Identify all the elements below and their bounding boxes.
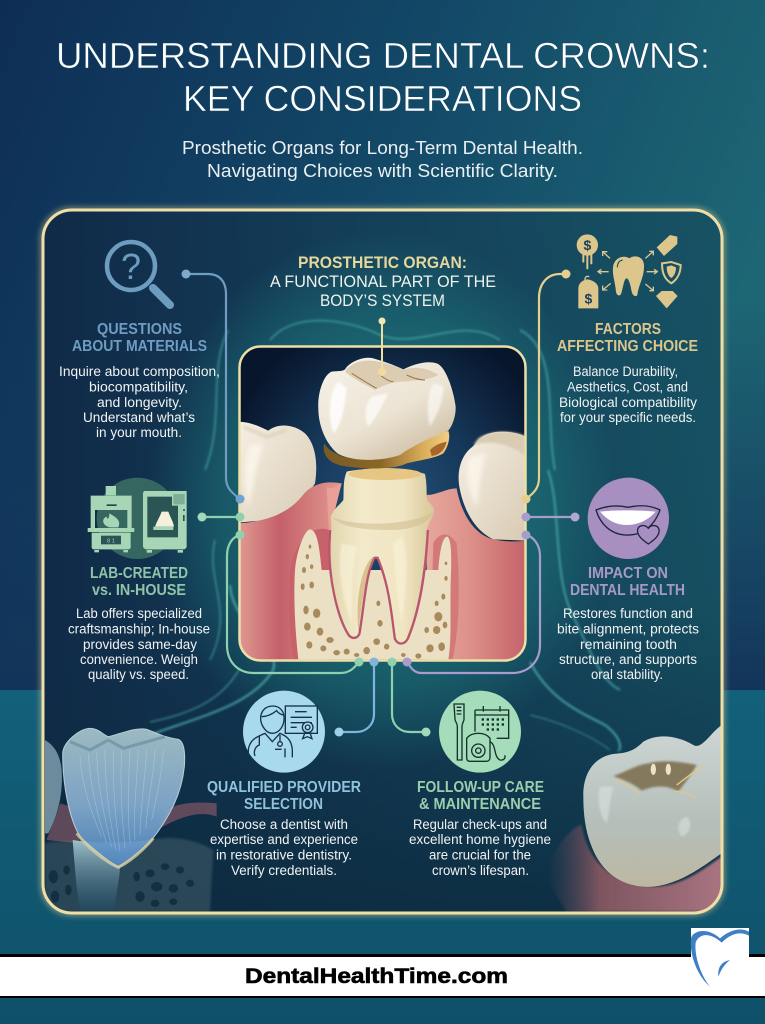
body text: Restores function and [563, 606, 693, 621]
title [56, 35, 710, 119]
connector lines [182, 270, 580, 736]
gum band [47, 802, 217, 843]
subtitle: Prosthetic Organs for Long-Term Dental Health. [182, 137, 583, 158]
subtitle: Navigating Choices with Scientific Clarity. [207, 160, 558, 181]
connector: impact lower loop [407, 535, 540, 673]
heading [570, 565, 685, 599]
body text: oral stability. [591, 667, 663, 682]
bone pores [301, 545, 448, 659]
junction dots on image frame [236, 494, 530, 666]
panel: factors affecting choice [557, 234, 698, 425]
heading [72, 321, 207, 355]
body text [210, 817, 358, 878]
heading: IMPACT ON [588, 565, 668, 582]
subtitle [182, 137, 583, 181]
floating crown [318, 358, 456, 460]
body text [409, 817, 551, 878]
connector: questions [182, 270, 240, 499]
image frame [240, 347, 525, 660]
heading: QUALIFIED PROVIDER [207, 779, 361, 796]
image border [240, 346, 526, 660]
icon: toothbrush, calendar, floss [439, 691, 521, 773]
body text: excellent home hygiene [409, 832, 551, 847]
panel: qualified provider selection [207, 691, 361, 878]
body text: Aesthetics, Cost, and [567, 380, 688, 394]
heading: SELECTION [244, 796, 323, 813]
heading [207, 779, 361, 813]
panel border [43, 210, 722, 913]
body text: Lab offers specialized [76, 606, 202, 621]
prepared tooth and roots [331, 469, 434, 642]
main panel background [43, 210, 722, 913]
occlusal fissure [613, 761, 697, 792]
heading: vs. IN-HOUSE [92, 582, 186, 599]
body text [559, 364, 697, 425]
panel: follow-up care and maintenance [409, 691, 551, 878]
heading: QUESTIONS [97, 321, 182, 338]
title: KEY CONSIDERATIONS [183, 78, 582, 119]
icon: smile with heart [588, 478, 669, 559]
footer band [0, 954, 765, 998]
decorative teal wisps [150, 321, 620, 750]
center heading: prosthetic organ [270, 253, 496, 310]
icon: tooth with factors: $ [584, 290, 592, 306]
side tooth [45, 740, 62, 833]
central pointer line [378, 318, 386, 376]
body text: craftsmanship; In-house [68, 622, 210, 636]
connector: lab [198, 512, 240, 522]
body text: remaining tooth [580, 637, 677, 652]
heading [90, 565, 188, 599]
title: UNDERSTANDING DENTAL CROWNS: [56, 35, 710, 76]
molar illustration, bottom right [547, 725, 722, 912]
right neighbouring tooth [459, 432, 527, 541]
icon: tooth with factors [577, 234, 681, 308]
body text: Balance Durability, [573, 364, 678, 379]
body text: Verify credentials. [231, 863, 337, 878]
heading [557, 321, 698, 355]
central tooth illustration [238, 318, 527, 660]
icon: furnace and milling machine [88, 478, 187, 559]
body text [59, 364, 220, 440]
icon: magnifying glass: ? [121, 246, 141, 287]
body text: biocompatibility, [89, 380, 188, 394]
center heading: prosthetic organ: A FUNCTIONAL PART OF THE [270, 272, 496, 291]
panel frame glow [43, 210, 722, 913]
body text: structure, and supports [559, 652, 697, 667]
enamel striations [80, 750, 163, 852]
root [73, 840, 150, 912]
body text: are crucial for the [429, 848, 531, 862]
icon: tooth with factors: $ [583, 237, 591, 253]
body text: and longevity. [97, 395, 182, 410]
body text: Understand what’s [83, 410, 195, 425]
connector: impact [526, 512, 580, 522]
connector: follow-up [392, 662, 430, 736]
icon: magnifying glass [107, 242, 170, 305]
left neighbouring tooth [238, 422, 316, 523]
heading: AFFECTING CHOICE [557, 338, 698, 355]
footer website text: DentalHealthTime.com [245, 965, 508, 988]
body text: Choose a dentist with [220, 817, 348, 832]
panel: questions about materials [59, 242, 220, 440]
gold band [324, 431, 449, 468]
center heading: prosthetic organ: BODY’S SYSTEM [320, 291, 445, 310]
body text [557, 606, 699, 682]
body text: crown’s lifespan. [432, 863, 529, 878]
heading: FACTORS [595, 321, 661, 338]
heading: FOLLOW-UP CARE [417, 779, 544, 796]
icon: furnace and milling machine: 8 1 [107, 538, 115, 544]
margin line [77, 833, 153, 867]
body text: expertise and experience [210, 832, 358, 847]
body text: in restorative dentistry. [216, 848, 352, 862]
body text: Regular check-ups and [413, 817, 547, 832]
connector: provider [334, 662, 374, 736]
body text: for your specific needs. [560, 410, 696, 425]
heading [417, 779, 544, 813]
heading: DENTAL HEALTH [570, 582, 685, 599]
body text: convenience. Weigh [80, 652, 198, 667]
icon: dentist and certificate [243, 691, 325, 773]
heading: ABOUT MATERIALS [72, 338, 207, 355]
body text: Inquire about composition, [59, 364, 220, 379]
footer logo: blue tooth [691, 928, 749, 987]
heading: LAB-CREATED [90, 565, 188, 582]
body text: in your mouth. [96, 425, 182, 440]
gums [238, 482, 342, 660]
body text: Biological compatibility [559, 395, 697, 410]
body text: provides same-day [83, 637, 197, 652]
periodontal ligament around roots [328, 530, 429, 645]
ghost tooth illustration, bottom left [45, 728, 217, 912]
panel: impact on dental health [557, 478, 699, 682]
panel: lab-created vs in-house [68, 478, 210, 682]
crown [63, 728, 185, 867]
porous bone [45, 838, 213, 912]
gum [547, 825, 722, 912]
alveolar bone [294, 529, 451, 659]
body text: bite alignment, protects [557, 622, 699, 636]
body text: quality vs. speed. [88, 667, 189, 682]
center heading: prosthetic organ: PROSTHETIC ORGAN: [298, 253, 467, 272]
heading: & MAINTENANCE [419, 796, 541, 813]
body text [68, 606, 210, 682]
tooth crown [583, 725, 722, 887]
connector: lab lower loop [227, 535, 359, 673]
connector: factors [526, 270, 570, 499]
